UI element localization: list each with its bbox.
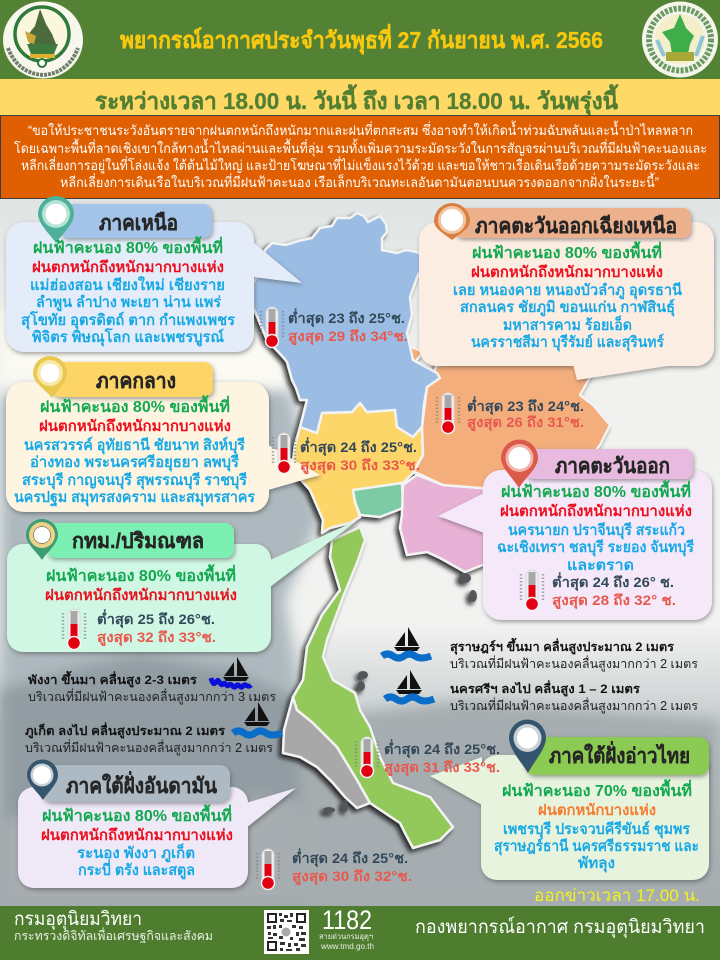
- panel: north: ฝนตกหนักถึงหนักมากบางแห่ง: [32, 258, 224, 276]
- temperature: gulf south: ต่ำสุด 24 ถึง 25°ช.: [384, 739, 500, 758]
- panel: gulf south: สุราษฎร์ธานี นครศรีธรรมราช และ: [494, 837, 699, 856]
- panel: andaman south: [18, 759, 296, 888]
- wave note: phuket: [25, 702, 282, 756]
- panel: gulf south: ฝนตกหนักบางแห่ง: [538, 802, 656, 819]
- panel: north: [6, 196, 302, 352]
- wave note: nakhon si thammarat: นครศรีฯ ลงไป คลื่นสูง 1 – 2 เมตร: [450, 680, 641, 697]
- department name: กรมอุตุนิยมวิทยา: [14, 909, 142, 931]
- panel: east: และตราด: [567, 557, 634, 574]
- panel: central: นครปฐม สมุทรสงคราม และสมุทรสาคร: [14, 489, 256, 507]
- subheading band: [0, 79, 720, 116]
- background landscape: [0, 198, 720, 906]
- panel: andaman south: ระนอง พังงา ภูเก็ต: [77, 843, 195, 863]
- wave note: phuket: บริเวณที่มีฝนฟ้าคะนองคลื่นสูงมากกว่า 2 เมตร: [25, 739, 273, 756]
- temperature: central: [273, 433, 420, 474]
- panel: northeast: ฝนฟ้าคะนอง 80% ของพื้นที่: [472, 241, 662, 262]
- temperature: northeast: [437, 393, 584, 434]
- panel: east: สูงสุด 28 ถึง 32° ช.: [552, 592, 676, 609]
- heading: andaman: [42, 765, 230, 802]
- icon: pin: [27, 759, 58, 800]
- wave note: phang nga: [28, 657, 276, 705]
- heading: andaman: ภาคใต้ฝั่งอันดามัน: [66, 770, 218, 798]
- wave note: phang nga: บริเวณที่มีฝนฟ้าคะนองคลื่นสูงมากกว่า 3 เมตร: [28, 688, 276, 705]
- panel: north: ฝนฟ้าคะนอง 80% ของพื้นที่: [33, 236, 223, 257]
- heading: northeast: [455, 208, 691, 238]
- wave note: phang nga: พังงา ขึ้นมา คลื่นสูง 2-3 เมตร: [28, 670, 198, 688]
- heading: bangkok: กทม./ปริมณฑล: [72, 530, 204, 553]
- panel: east: [438, 440, 712, 620]
- icon: meteorological department logo: [642, 2, 718, 78]
- wave note: surat thani: บริเวณที่มีฝนฟ้าคะนองคลื่นสูงมากกว่า 2 เมตร: [450, 655, 698, 672]
- panel: central: อ่างทอง พระนครศรีอยุธยา ลพบุรี: [30, 454, 240, 472]
- qr code: [264, 910, 309, 954]
- map of Thailand: [253, 213, 610, 848]
- temperature: central: ต่ำสุด 24 ถึง 25°ช.: [300, 437, 417, 456]
- panel: gulf south: เพชรบุรี ประจวบคีรีขันธ์ ชุมพร: [503, 820, 691, 839]
- map: islands: [323, 573, 477, 813]
- ministry name: กระทรวงดิจิทัลเพื่อเศรษฐกิจและสังคม: [14, 927, 213, 943]
- panel: northeast: ฝนตกหนักถึงหนักมากบางแห่ง: [471, 263, 663, 281]
- temperature: north: [261, 307, 408, 348]
- panel: andaman south: กระบี่ ตรัง และสตูล: [78, 859, 195, 880]
- panel: north: สุโขทัย อุตรดิตถ์ ตาก กำแพงเพชร: [21, 310, 236, 330]
- warning text block: [0, 116, 720, 198]
- icon: thermometer: [521, 570, 543, 610]
- footer band: [0, 905, 720, 960]
- panel: east: ฝนฟ้าคะนอง 80% ของพื้นที่: [501, 480, 691, 501]
- panel: gulf south: [430, 720, 709, 880]
- panel: northeast: มหาสารคาม ร้อยเอ็ด: [503, 315, 632, 334]
- map region: south: [293, 527, 453, 848]
- title: พยากรณ์อากาศประจำวันพุธที่ 27 กันยายน พ.ศ. 2566: [120, 23, 603, 55]
- panel: gulf south: พัทลุง: [578, 855, 615, 873]
- icon: pin: [501, 440, 538, 488]
- temperature: andaman south: ต่ำสุด 24 ถึง 25°ช.: [292, 848, 408, 867]
- heading: gulf: ภาคใต้ฝั่งอ่าวไทย: [549, 740, 690, 768]
- heading: central: ภาคกลาง: [96, 370, 176, 393]
- panel: north: แม่ฮ่องสอน เชียงใหม่ เชียงราย: [30, 276, 225, 294]
- panel: northeast: [419, 203, 714, 380]
- wave note: nakhon si thammarat: [385, 670, 698, 714]
- icon: pin: [33, 356, 67, 398]
- panel: northeast: สกลนคร ชัยภูมิ ขอนแก่น กาฬสินธุ์: [460, 298, 675, 317]
- map region: bangkok: [353, 483, 403, 517]
- panel: east: นครนายก ปราจีนบุรี สระแก้ว: [508, 522, 685, 540]
- forecast division: กองพยากรณ์อากาศ กรมอุตุนิยมวิทยา: [415, 916, 705, 939]
- issue time: ออกข่าวเวลา 17.00 น.: [534, 886, 700, 905]
- panel: central: ฝนตกหนักถึงหนักมากบางแห่ง: [39, 417, 231, 435]
- hotline caption: สายด่วนกรมอุตุฯ: [319, 932, 373, 941]
- panel: northeast: นครราชสีมา บุรีรัมย์ และสุรินทร์: [471, 333, 665, 352]
- heading: east: [525, 449, 693, 479]
- panel: east: ฉะเชิงเทรา ชลบุรี ระยอง จันทบุรี: [497, 538, 695, 557]
- icon: pin: [509, 720, 546, 773]
- hotline number: 1182: [322, 905, 372, 935]
- wave note: surat thani: [382, 627, 698, 672]
- panel: gulf south: ฝนฟ้าคะนอง 70% ของพื้นที่: [502, 779, 692, 800]
- wave note: surat thani: สุราษฎร์ฯ ขึ้นมา คลื่นสูงประมาณ 2 เมตร: [450, 637, 675, 655]
- wave note: phuket: ภูเก็ต ลงไป คลื่นสูงประมาณ 2 เมตร: [25, 722, 226, 739]
- map region: east: [400, 475, 490, 572]
- temperature: gulf south: สูงสุด 31 ถึง 33°ช.: [384, 759, 500, 776]
- temperature: andaman south: [257, 848, 412, 890]
- map region: north: [253, 213, 440, 437]
- panel: central: สระบุรี กาญจนบุรี สุพรรณบุรี ราชบุรี: [22, 472, 248, 490]
- panel: north: พิจิตร พิษณุโลก และเพชรบูรณ์: [32, 327, 224, 347]
- heading: gulf: [525, 737, 709, 775]
- icon: ministry logo: [3, 2, 83, 78]
- temperature: gulf south: [356, 737, 500, 778]
- warning text block: หลีกเลี่ยงการเดินเรือในบริเวณที่มีฝนฟ้าคะนอง เรือเล็กบริเวณทะเลอันดามันตอนบนควรงดออกจากฝั่งในระยะนี้”: [60, 172, 659, 190]
- icon: pin: [26, 519, 58, 560]
- panel: bangkok and vicinity: [7, 519, 358, 652]
- wave note: nakhon si thammarat: บริเวณที่มีฝนฟ้าคะนองคลื่นสูงมากกว่า 2 เมตร: [450, 697, 698, 714]
- heading: central: [52, 362, 213, 397]
- panel: central: [6, 356, 320, 512]
- temperature: northeast: ต่ำสุด 23 ถึง 24°ช.: [467, 396, 584, 415]
- temperature: andaman south: สูงสุด 30 ถึง 32°ช.: [292, 868, 412, 885]
- header band: [0, 0, 720, 80]
- heading: bangkok: [47, 523, 234, 558]
- panel: east: ต่ำสุด 24 ถึง 26° ช.: [552, 572, 674, 591]
- panel: bangkok and vicinity: ฝนฟ้าคะนอง 80% ของพื้นที่: [46, 564, 236, 585]
- heading: east: ภาคตะวันออก: [555, 455, 670, 478]
- panel: central: ฝนฟ้าคะนอง 80% ของพื้นที่: [40, 395, 230, 416]
- panel: central: นครสวรรค์ อุทัยธานี ชัยนาท สิงห์บุรี: [24, 436, 246, 455]
- website: www.tmd.go.th: [320, 942, 374, 951]
- panel: bangkok and vicinity: สูงสุด 32 ถึง 33°ช.: [97, 629, 216, 646]
- heading: northeast: ภาคตะวันออกเฉียงเหนือ: [475, 214, 677, 238]
- temperature: north: ต่ำสุด 23 ถึง 25°ช.: [288, 308, 405, 327]
- icon: pin: [38, 196, 74, 243]
- temperature: central: สูงสุด 30 ถึง 33°ช.: [300, 457, 420, 474]
- map region: central: [292, 403, 423, 533]
- temperature: north: สูงสุด 29 ถึง 34°ช.: [288, 328, 408, 345]
- panel: bangkok and vicinity: ฝนตกหนักถึงหนักมากบางแห่ง: [45, 586, 237, 604]
- panel: northeast: เลย หนองคาย หนองบัวลำภู อุดรธานี: [453, 282, 683, 300]
- icon: thermometer: [63, 609, 85, 650]
- panel: east: ฝนตกหนักถึงหนักมากบางแห่ง: [500, 502, 692, 520]
- icon: pin: [434, 203, 470, 240]
- map region: south west coast: [283, 697, 370, 808]
- subheading band: ระหว่างเวลา 18.00 น. วันนี้ ถึง เวลา 18.00 น. วันพรุ่งนี้: [95, 84, 619, 116]
- panel: north: ลำพูน ลำปาง พะเยา น่าน แพร่: [36, 294, 222, 312]
- panel: andaman south: ฝนตกหนักถึงหนักมากบางแห่ง: [41, 826, 233, 844]
- map region: northeast: [413, 360, 610, 488]
- heading: north: [60, 204, 212, 238]
- temperature: northeast: สูงสุด 26 ถึง 31°ช.: [467, 414, 584, 431]
- panel: andaman south: ฝนฟ้าคะนอง 80% ของพื้นที่: [42, 804, 232, 825]
- heading: north: ภาคเหนือ: [99, 211, 178, 235]
- panel: bangkok and vicinity: ต่ำสุด 25 ถึง 26°ช.: [97, 609, 215, 628]
